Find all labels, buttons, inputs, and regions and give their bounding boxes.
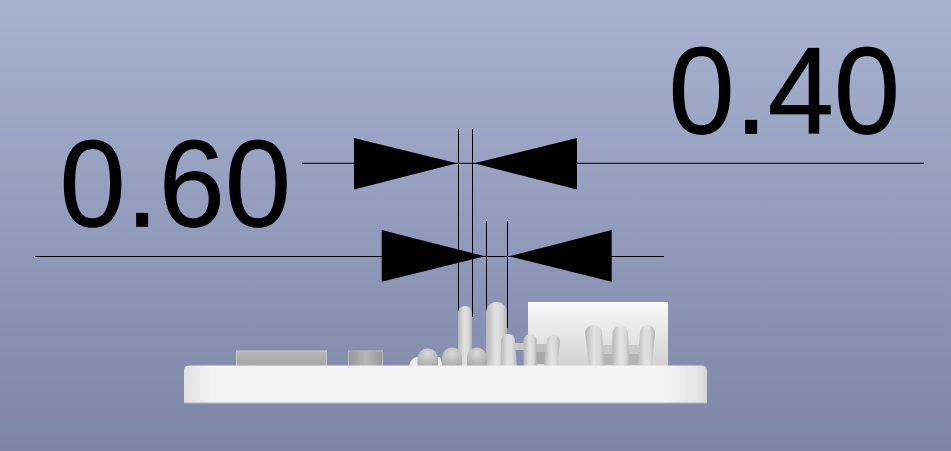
- part: rectangular pads: [236, 351, 382, 366]
- part: base plate: [184, 366, 707, 404]
- dimension label: 0.60: 0.60: [60, 115, 291, 253]
- extension lines: [458, 129, 508, 328]
- dimension 0.40: leader line and arrows: [302, 138, 924, 190]
- part: back block: [528, 302, 668, 366]
- part: pins and domes: [409, 302, 655, 366]
- dimension label: 0.40: 0.40: [668, 22, 900, 160]
- dimension 0.60: leader line and arrows: [35, 230, 664, 282]
